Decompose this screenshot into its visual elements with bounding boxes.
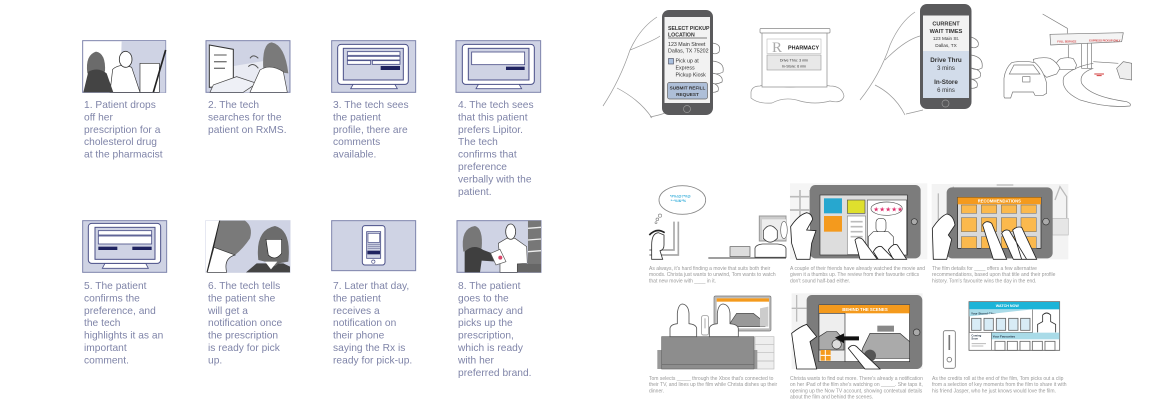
- panel: storyboard 1: *#%!@?*#@: [670, 194, 691, 198]
- text: step 5: 5. The patient: [84, 281, 147, 292]
- panel: storyboard 1: [649, 183, 787, 259]
- panel: phone in hand, current wait times: 123 Main St.: [933, 36, 959, 41]
- text: step 7: the patient: [333, 293, 381, 304]
- panel: phone in hand, current wait times: CURRENT: [932, 22, 960, 28]
- panel: drive-through pharmacy scene: [1004, 14, 1132, 106]
- panel: storyboard 6, watch now screen: Soon: [971, 336, 978, 340]
- panel: drive-through pharmacy scene: FULL SERVICE: [1057, 40, 1077, 44]
- panel: pharmacy sign: Drive Thru: 3 min: [780, 58, 808, 62]
- text: step 1: cholesterol drug: [84, 137, 157, 148]
- panel: pharmacy sign: [751, 28, 844, 103]
- caption: storyboard 2: A couple of their friends have already watched the movie and: [790, 266, 925, 272]
- panel: storyboard 6, watch now screen: Your Favourites: [993, 334, 1015, 338]
- panel: phone in hand, current wait times: [860, 4, 982, 115]
- panel: step 6 image: [206, 221, 290, 272]
- caption: storyboard 4: their TV, and lines up the film while Christa dishes up their: [649, 382, 777, 388]
- panel: phone in hand, current wait times: 3 mins: [937, 66, 955, 72]
- panel: pharmacy sign: R: [772, 40, 782, 56]
- text: step 4: patient.: [458, 187, 492, 198]
- text: step 7: saying the Rx is: [333, 343, 405, 354]
- text: step 7: receives a: [333, 306, 380, 317]
- text: step 4: verbally with the: [458, 174, 532, 185]
- text: step 6: will get a: [207, 306, 248, 317]
- caption: storyboard 2: don't sound half-bad either.: [790, 278, 850, 284]
- caption: storyboard 1: As always, it's hard finding a movie that suits both their: [649, 266, 771, 272]
- caption: storyboard 6: his friend Jasper, who he just knows would love the film.: [932, 388, 1056, 394]
- text: step 6: up.: [208, 355, 222, 366]
- text: step 8: picks up the: [458, 318, 513, 329]
- caption: storyboard 1: that new movie with ____ in it.: [649, 278, 716, 284]
- text: step 7: 7. Later that day,: [333, 281, 409, 292]
- panel: step 7 image: [332, 221, 416, 271]
- caption: storyboard 5: on her iPad of the film she's watching on _____. She taps it,: [790, 382, 923, 388]
- text: step 8: 8. The patient: [458, 281, 521, 292]
- caption: storyboard 3: The film details for ____ offers a few alternative: [932, 266, 1037, 272]
- caption: storyboard 5: opening up the Now TV account, showing contextual details: [790, 388, 923, 394]
- panel: step 1 image: [83, 41, 166, 92]
- panel: phone in hand, current wait times: Dallas, TX: [935, 43, 958, 48]
- panel: phone in hand, select pickup location: [603, 10, 723, 118]
- text: step 8: pharmacy and: [458, 306, 523, 317]
- panel: storyboard 6, watch now screen: [943, 302, 1060, 368]
- panel: storyboard 4, couple on sofa: [657, 296, 774, 369]
- panel: pharmacy sign: PHARMACY: [788, 46, 820, 52]
- text: step 7: notification on: [333, 318, 396, 329]
- caption: storyboard 3: recommendations, based upon that title and their profile: [932, 272, 1056, 278]
- text: step 6: is ready for pick: [208, 343, 281, 354]
- text: step 6: the patient she: [208, 293, 276, 304]
- text: step 5: highlights it as an: [84, 331, 163, 342]
- text: step 6: the prescription: [208, 331, 278, 342]
- text: step 7: their phone: [333, 331, 385, 342]
- text: step 4: The tech: [458, 137, 498, 148]
- text: step 8: with her: [457, 355, 494, 366]
- panel: phone in hand, current wait times: Drive Thru: [930, 57, 962, 64]
- panel: storyboard 3, recommendations: RECOMMENDATIONS: [978, 198, 1021, 203]
- text: step 8: preferred brand.: [458, 368, 532, 379]
- panel: phone in hand, select pickup location: Express: [676, 66, 695, 72]
- text: step 6: 6. The tech tells: [208, 281, 280, 292]
- panel: phone in hand, select pickup location: LOCATION: [668, 32, 695, 38]
- panel: phone in hand, current wait times: 6 mins: [937, 88, 955, 94]
- panel: step 2 image: [206, 41, 290, 92]
- panel: phone in hand, select pickup location: SELECT PICKUP: [668, 26, 710, 32]
- text: step 8: prescription,: [458, 331, 514, 342]
- text: step 2: searches for the: [208, 112, 282, 123]
- panel: phone in hand, select pickup location: SUBMIT REFILL: [670, 86, 705, 90]
- text: step 4: that this patient: [458, 112, 528, 123]
- panel: phone in hand, select pickup location: Dallas, TX 75202: [668, 49, 709, 55]
- caption: storyboard 5: about the film and behind the scenes.: [790, 395, 873, 401]
- panel: storyboard 2, tablet with reviews: ★★★★★: [873, 205, 903, 213]
- panel: storyboard 6, watch now screen: WATCH NOW: [996, 304, 1019, 308]
- panel: step 8 image: [457, 221, 541, 272]
- text: step 4: 4. The tech sees: [458, 100, 534, 111]
- text: step 3: comments: [333, 137, 380, 148]
- text: step 4: prefers Lipitor.: [458, 125, 523, 136]
- panel: phone in hand, select pickup location: Pick up at: [676, 58, 699, 64]
- text: step 2: patient on RxMS.: [208, 125, 287, 136]
- text: step 1: prescription for a: [84, 125, 161, 136]
- caption: storyboard 6: from a selection of key moments from the film to share it with: [932, 382, 1067, 388]
- panel: phone in hand, current wait times: In-Store: [934, 79, 958, 86]
- text: step 5: comment.: [84, 355, 129, 366]
- text: step 8: which is ready: [457, 343, 524, 354]
- text: step 4: confirms that: [458, 150, 517, 161]
- panel: step 3 image: [332, 41, 416, 92]
- caption: storyboard 2: given it a thumbs up. The review from their favourite critics: [790, 272, 920, 278]
- text: step 3: profile, there are: [333, 125, 408, 136]
- text: step 7: ready for pick-up.: [333, 355, 412, 366]
- panel: storyboard 2, tablet with reviews: [790, 183, 927, 259]
- panel: storyboard 1: *~%!&*%: [671, 199, 687, 203]
- panel: drive-through pharmacy scene: EXPRESS PICKUP ONLY: [1089, 38, 1121, 42]
- text: step 5: important: [84, 343, 127, 354]
- panel: phone in hand, select pickup location: REQUEST: [676, 92, 699, 97]
- text: step 3: the patient: [333, 112, 381, 123]
- caption: storyboard 5: Christa wants to find out more. There's already a notification: [790, 376, 923, 382]
- panel: step 4 image: [456, 41, 541, 92]
- panel: phone in hand, current wait times: WAIT TIMES: [930, 29, 963, 35]
- text: step 4: preference: [458, 162, 507, 173]
- panel: phone in hand, select pickup location: Pickup Kiosk: [676, 72, 706, 78]
- panel: phone in hand, select pickup location: 123 Main Street: [668, 42, 706, 48]
- panel: storyboard 5, behind the scenes: BEHIND THE SCENES: [842, 307, 888, 312]
- text: step 2: 2. The tech: [208, 100, 259, 111]
- panel: storyboard 6, watch now screen: Coming: [971, 333, 982, 337]
- text: step 5: confirms the: [84, 293, 140, 304]
- text: step 8: goes to the: [458, 293, 509, 304]
- text: step 1: 1. Patient drops: [84, 100, 156, 111]
- caption: storyboard 3: history. Tom's favourite wins the day in the end.: [932, 278, 1036, 284]
- caption: storyboard 1: moods. Christa just wants to unwind, Tom wants to watch: [649, 272, 776, 278]
- caption: storyboard 4: dinner.: [649, 388, 664, 394]
- text: step 1: off her: [84, 112, 113, 123]
- text: step 6: notification once: [208, 318, 282, 329]
- text: step 3: available.: [333, 150, 376, 161]
- caption: storyboard 4: Tom selects _____ through the Xbox that's connected to: [649, 376, 774, 382]
- text: step 5: the tech: [84, 318, 120, 329]
- caption: storyboard 6: As the credits roll at the end of the film, Tom picks out a clip: [932, 376, 1064, 382]
- panel: step 5 image: [83, 221, 167, 272]
- panel: pharmacy sign: In-Store: 6 min: [782, 64, 806, 68]
- panel: storyboard 5, behind the scenes: [792, 293, 923, 369]
- text: step 3: 3. The tech sees: [333, 100, 409, 111]
- text: step 1: at the pharmacist: [84, 150, 163, 161]
- text: step 5: preference, and: [84, 306, 156, 317]
- panel: storyboard 6, watch now screen: Your Stored Clips: [971, 311, 996, 315]
- panel: storyboard 3, recommendations: [932, 184, 1068, 259]
